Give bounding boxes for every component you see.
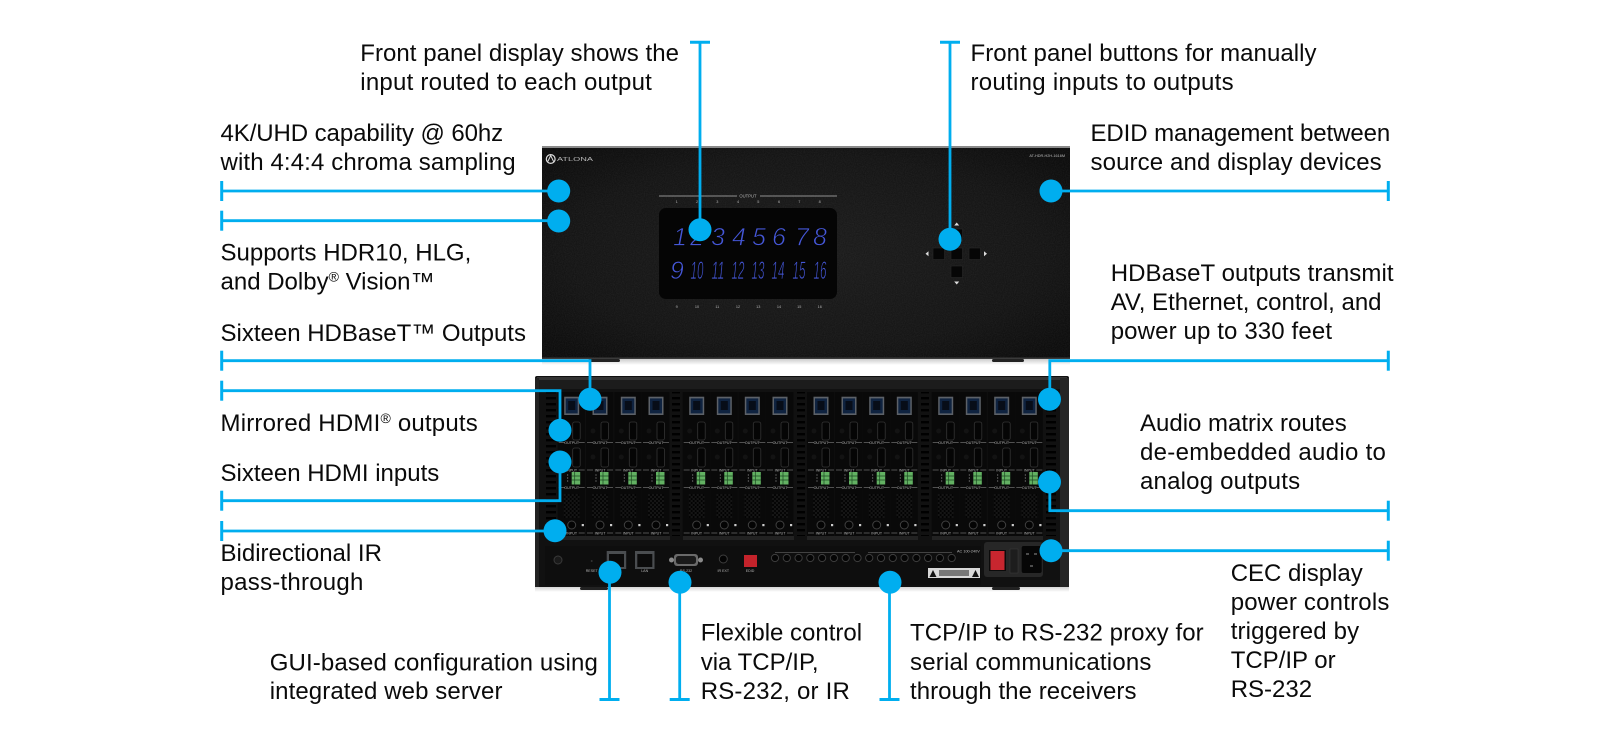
leader: HDMI inputs [222,450,571,511]
text: audio matrix: analog outputs [1140,468,1300,495]
input and output modules [558,392,1043,536]
text: HDR support: and Dolby [220,269,435,296]
IR output jacks [771,552,955,562]
module bank vents [546,392,1056,536]
text: HDMI inputs: Sixteen HDMI inputs [220,460,439,487]
lower numbering: 14 [777,305,781,309]
text: CEC power controls: RS-232 [1231,676,1312,703]
callout: CEC power controls [1040,539,1390,703]
control connector strip: EDID [746,569,755,573]
leader: front panel display [688,42,712,241]
power inlet module [984,542,1043,577]
control connector strip: RS-232 [680,569,692,573]
model number: AT-HDR-H2H-1616M [1029,154,1065,158]
text: 4K capability: 4K/UHD capability @ 60hz [220,120,503,147]
LED display: 14 [772,257,784,285]
callout: EDID management [1040,120,1390,202]
callout: HDBaseT outputs [220,320,602,411]
lower numbering: 16 [818,305,822,309]
text: HDR support: Vision™ [339,269,435,296]
lower numbering: 9 [676,305,678,309]
callout: front panel display [360,40,712,241]
LED display: 10 [690,257,704,285]
control connector strip [545,546,981,585]
lower numbering: 10 [695,305,699,309]
rear feet [580,587,1020,590]
text: front panel buttons: Front panel buttons for manually [970,40,1317,67]
callout: web GUI [270,561,622,705]
text: web GUI: integrated web server [270,678,503,705]
text: HDBaseT outputs: Sixteen HDBaseT™ Outputs [220,320,526,347]
text: EDID management: source and display devices [1090,149,1382,176]
control connector strip: LAN [641,569,649,573]
leader: 4K capability [222,180,570,202]
output numbering header: 8 [819,200,821,204]
front feet [588,359,1024,362]
text: audio matrix: Audio matrix routes [1140,410,1347,437]
brand logo: ATLONA [557,157,594,163]
navigation buttons [926,222,987,284]
output numbering header: 2 [696,200,698,204]
LED display: 8 [813,224,827,252]
LED display: 13 [752,257,765,285]
callout: RS-232 proxy [878,571,1204,705]
LED display [659,208,837,299]
LED display: 4 [732,224,746,252]
leader: CEC power controls [1040,539,1388,562]
text: CEC power controls: triggered by [1231,618,1359,645]
text: front panel buttons: routing inputs to outputs [970,69,1234,96]
LED display: 2 [689,224,704,252]
LED display: 3 [711,224,725,252]
text: HDBaseT transmission: power up to 330 feet [1111,318,1332,345]
AC rating text: AC 100-240V [957,550,980,554]
lower numbering: 15 [797,305,801,309]
callout: HDBaseT transmission [1038,260,1394,411]
LED display: 16 [814,257,827,285]
text: front panel display: input routed to each output [360,69,652,96]
LED display: 5 [752,224,766,252]
text: mirrored HDMI outputs: ® [380,410,391,426]
warning label [928,568,980,578]
output numbering header: 6 [778,200,780,204]
text: flexible control: Flexible control [701,620,862,647]
output numbering header: 1 [676,200,678,204]
text: HDBaseT transmission: AV, Ethernet, control, and [1111,289,1382,316]
lower numbering [676,305,822,309]
text: HDBaseT transmission: HDBaseT outputs transmit [1111,260,1394,287]
text: mirrored HDMI outputs: Mirrored HDMI [220,410,478,437]
LED display: 15 [792,257,806,285]
rear unit: matrix switcher rear panel [535,376,1069,592]
text: CEC power controls: power controls [1231,589,1390,616]
control connector strip: IR EXT [718,569,730,573]
output numbering header: 5 [757,200,759,204]
text: mirrored HDMI outputs: outputs [391,410,478,437]
callout: HDR support [220,210,570,296]
callout: audio matrix [1038,410,1388,521]
control connector strip: RESET [586,569,598,573]
output numbering header [659,194,837,204]
brand logo [546,155,594,163]
LED display: 6 [772,224,786,252]
text: HDR support: Supports HDR10, HLG, [220,240,471,267]
leader: audio matrix [1038,470,1388,521]
text: RS-232 proxy: TCP/IP to RS-232 proxy for [910,620,1204,647]
callout: 4K capability [220,120,570,202]
output numbering header: OUTPUT [739,194,757,198]
module bank rails [558,536,1043,540]
front unit: matrix switcher front panel [542,146,1070,365]
LED display: 12 [732,257,745,285]
text: flexible control: RS-232, or IR [701,678,850,705]
leader: HDR support [222,210,570,232]
leader: HDBaseT outputs [222,351,601,411]
text: HDR support: ® [329,269,340,285]
callout: HDMI inputs [220,450,572,511]
leader: front panel buttons [938,42,962,251]
text: EDID management: EDID management between [1090,120,1390,147]
leader: HDBaseT transmission [1038,351,1388,411]
leader: flexible control [668,571,692,700]
callout: mirrored HDMI outputs [220,381,572,442]
callout: flexible control [668,571,862,705]
text: RS-232 proxy: serial communications [910,649,1152,676]
output numbering header: 7 [798,200,800,204]
leader: EDID management [1040,180,1388,202]
leader: RS-232 proxy [878,571,902,700]
lower numbering: 11 [715,305,719,309]
text: flexible control: via TCP/IP, [701,649,819,676]
leader: mirrored HDMI outputs [222,381,571,442]
lower numbering: 13 [756,305,760,309]
output numbering header: 3 [716,200,718,204]
LED display: 9 [670,257,684,285]
text: CEC power controls: TCP/IP or [1231,647,1336,674]
text: RS-232 proxy: through the receivers [910,678,1137,705]
text: IR pass-through: pass-through [220,569,364,596]
leader: IR pass-through [222,519,566,542]
lower numbering: 12 [736,305,740,309]
LED display: 7 [795,224,810,252]
text: front panel display: Front panel display shows the [360,40,679,67]
leader: web GUI [598,561,622,700]
text: IR pass-through: Bidirectional IR [220,540,382,567]
LED display: 1 [673,224,687,252]
text: CEC power controls: CEC display [1231,560,1363,587]
LED display: 11 [712,257,724,285]
callout: front panel buttons [938,40,1317,251]
output numbering header: 4 [737,200,739,204]
text: audio matrix: de-embedded audio to [1140,439,1386,466]
callout: IR pass-through [220,519,566,596]
text: web GUI: GUI-based configuration using [270,650,598,677]
text: 4K capability: with 4:4:4 chroma sampling [220,149,516,176]
